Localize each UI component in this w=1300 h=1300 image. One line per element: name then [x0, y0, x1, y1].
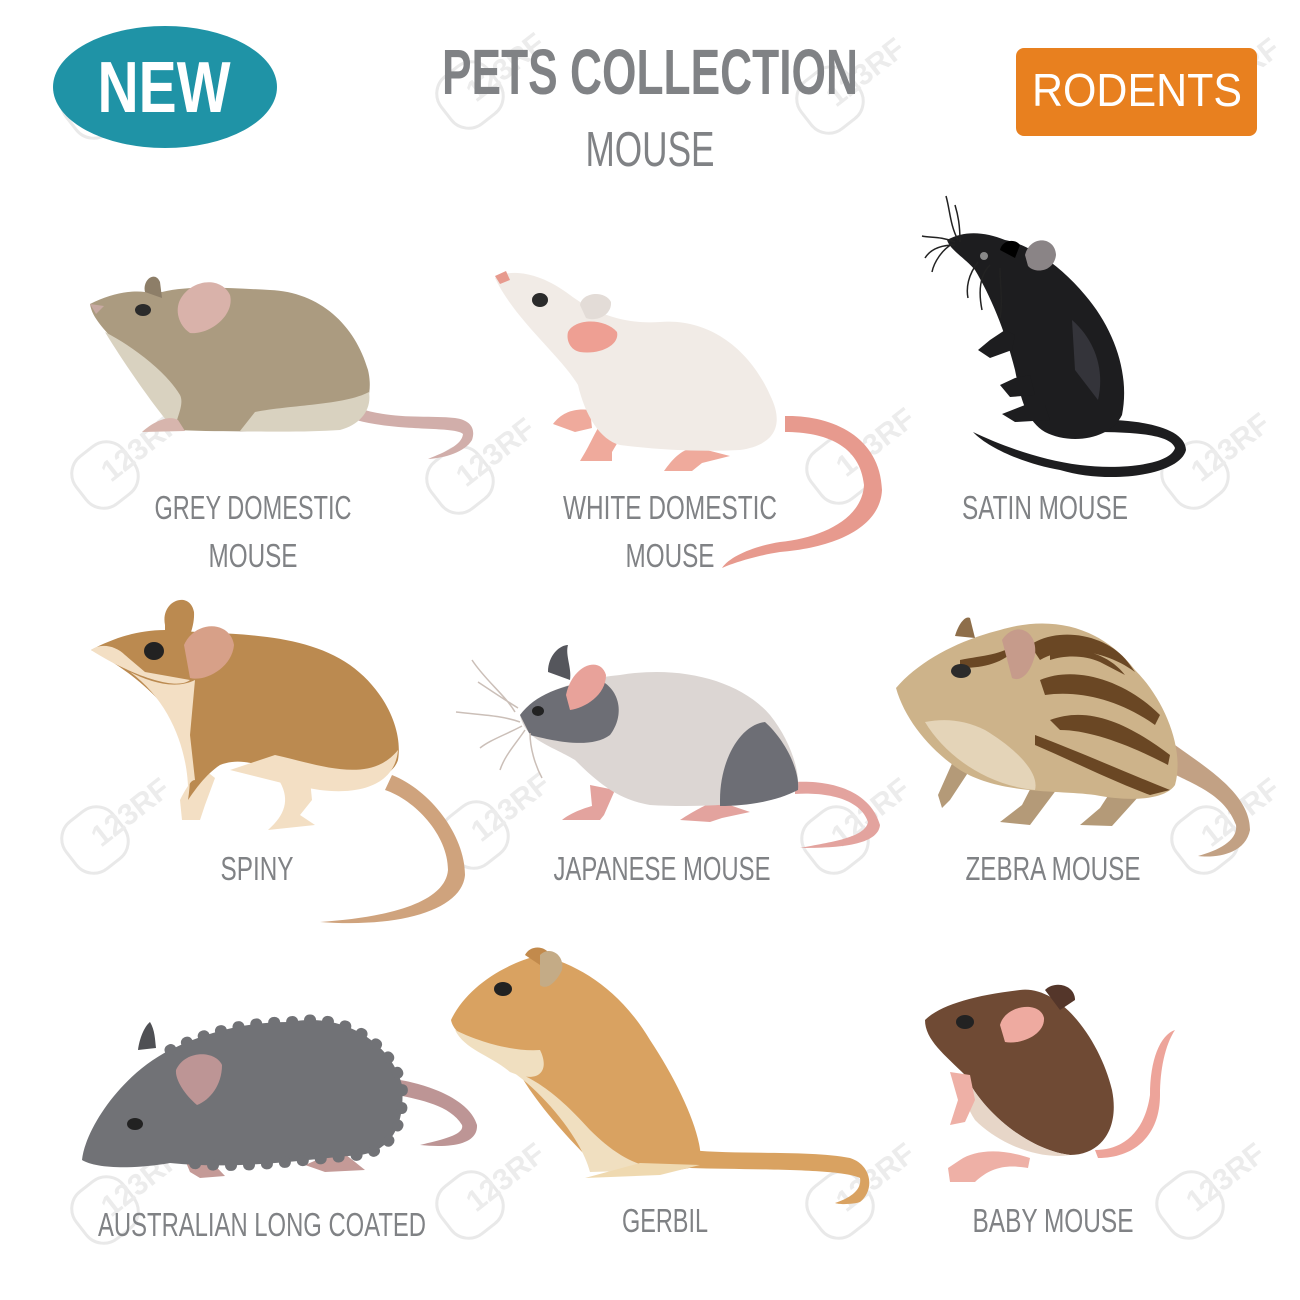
watermarks: 123RF: [85, 37, 176, 118]
animal: satin mouse: [922, 196, 1186, 477]
watermarks: 123RF: [450, 412, 541, 493]
animal: spiny: [91, 600, 465, 923]
label: baby mouse: BABY MOUSE: [972, 1202, 1134, 1239]
watermarks: 123RF: [1185, 407, 1276, 488]
label: grey domestic mouse: GREY DOMESTIC: [154, 489, 352, 526]
badge: RODENTS: RODENTS: [1032, 64, 1242, 116]
animal: baby mouse: [925, 985, 1175, 1182]
label: zebra mouse: ZEBRA MOUSE: [966, 850, 1140, 887]
badge: NEW: NEW: [98, 48, 231, 128]
label: grey domestic mouse: MOUSE: [208, 537, 298, 574]
watermarks: 123RF: [1195, 32, 1286, 113]
watermarks: 123RF: [1180, 1137, 1271, 1218]
animal: white domestic mouse: [495, 271, 882, 568]
watermarks: 123RF: [825, 772, 916, 853]
animal: gerbil: [451, 948, 869, 1204]
watermarks: 123RF: [85, 772, 176, 853]
animal: australian long coated: [82, 1020, 477, 1178]
label: gerbil: GERBIL: [622, 1202, 708, 1239]
label: satin mouse: SATIN MOUSE: [962, 489, 1128, 526]
watermarks: 123RF: [820, 32, 911, 113]
watermarks: 123RF: [1195, 772, 1286, 853]
subtitle: MOUSE: [586, 123, 714, 177]
watermarks: 123RF: [95, 1142, 186, 1223]
badge: NEW: [53, 26, 277, 148]
watermarks: 123RF: [830, 1137, 921, 1218]
label: grey domestic mouse: [154, 489, 352, 574]
animal: zebra mouse: [896, 617, 1250, 857]
watermarks: 123RF: [95, 407, 186, 488]
watermarks: 123RF: [830, 402, 921, 483]
animal: grey domestic mouse: [90, 277, 473, 459]
label: japanese mouse: JAPANESE MOUSE: [554, 850, 770, 887]
title: PETS COLLECTION: [442, 36, 858, 108]
label: spiny: SPINY: [220, 850, 294, 887]
watermarks: 123RF: [460, 1137, 551, 1218]
badge: RODENTS: [1016, 48, 1257, 136]
label: white domestic mouse: MOUSE: [626, 537, 714, 574]
animal: japanese mouse: [456, 645, 880, 848]
label: white domestic mouse: WHITE DOMESTIC: [563, 489, 777, 526]
label: white domestic mouse: [563, 489, 777, 574]
watermarks: 123RF: [460, 27, 551, 108]
watermarks: 123RF: [465, 767, 556, 848]
label: australian long coated: AUSTRALIAN LONG COATED: [98, 1206, 426, 1243]
